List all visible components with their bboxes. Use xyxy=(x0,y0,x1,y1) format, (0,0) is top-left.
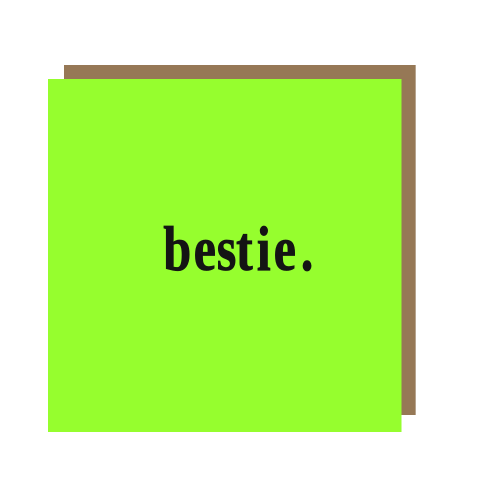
kraft envelope xyxy=(64,65,416,415)
card message: bestie. xyxy=(163,215,313,284)
neon green card xyxy=(48,79,402,432)
